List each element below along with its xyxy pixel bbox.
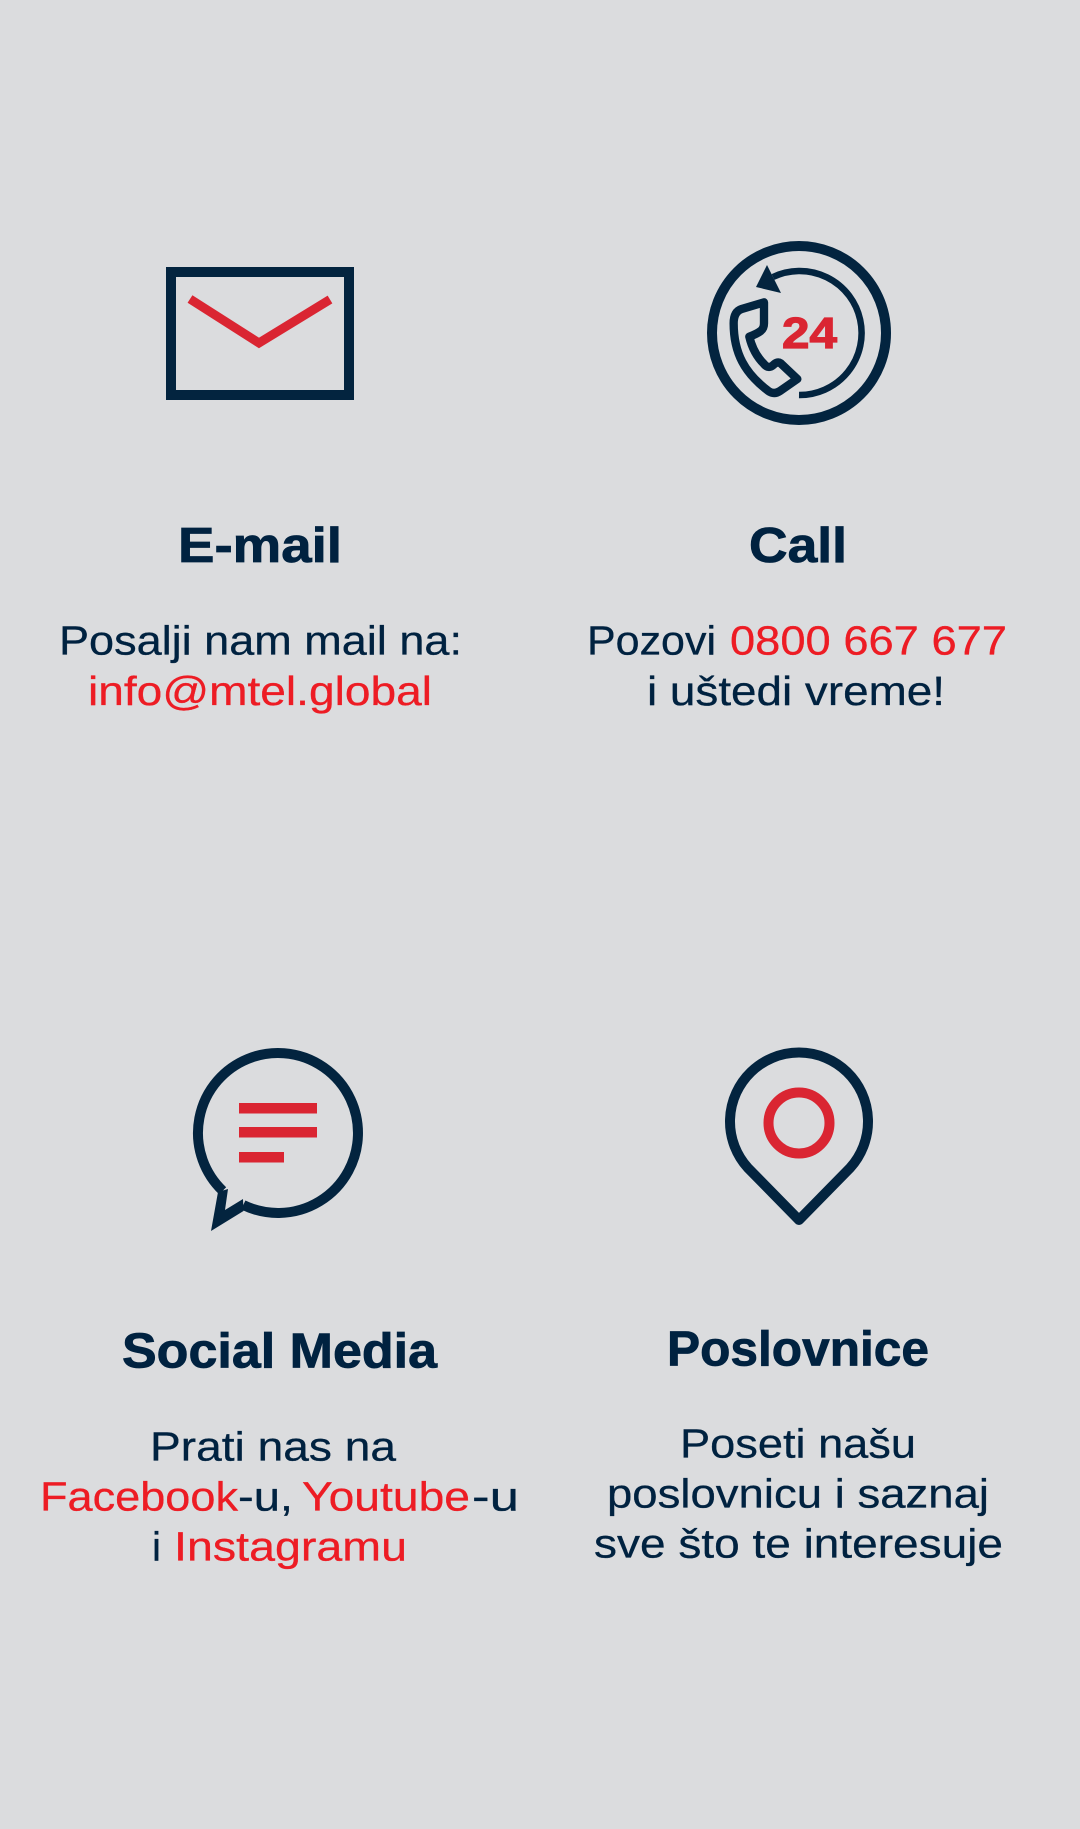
icon: map pin bbox=[730, 1053, 868, 1220]
text: call instructions: Pozovi bbox=[587, 618, 716, 664]
text: call instructions bbox=[587, 618, 1007, 714]
text: e-mail instructions: Posalji nam mail na: bbox=[59, 618, 462, 664]
heading: e-mail: E-mail bbox=[178, 519, 342, 573]
icon: speech bubble bbox=[198, 1053, 358, 1231]
heading: call: Call bbox=[749, 519, 847, 573]
text: call instructions: 0800 667 677 bbox=[730, 618, 1007, 664]
text: social media instructions: Youtube bbox=[302, 1474, 470, 1520]
panel: e-mail bbox=[59, 272, 462, 714]
panel: call bbox=[587, 246, 1007, 714]
icon: 24 hour phone bbox=[712, 246, 886, 420]
text: social media instructions: -u, bbox=[238, 1474, 293, 1520]
text: poslovnice instructions bbox=[594, 1420, 1003, 1566]
text: call instructions: i uštedi vreme! bbox=[647, 668, 945, 714]
text: poslovnice instructions: Poseti našu bbox=[680, 1420, 916, 1466]
text: social media instructions bbox=[40, 1424, 519, 1570]
text: social media instructions: i bbox=[152, 1524, 161, 1570]
text: e-mail instructions: info@mtel.global bbox=[88, 668, 432, 714]
icon: 24 hour phone: 24 bbox=[782, 309, 838, 358]
text: poslovnice instructions: poslovnicu i saznaj bbox=[607, 1470, 989, 1516]
heading: social media: Social Media bbox=[122, 1324, 438, 1378]
text: poslovnice instructions: sve što te interesuje bbox=[594, 1520, 1003, 1566]
panel: poslovnice bbox=[594, 1053, 1003, 1566]
text: social media instructions: -u bbox=[472, 1474, 519, 1520]
panel: social media bbox=[40, 1053, 519, 1570]
icon: envelope bbox=[171, 272, 349, 395]
text: social media instructions: Prati nas na bbox=[150, 1424, 396, 1470]
text: e-mail instructions bbox=[59, 618, 462, 714]
text: social media instructions: Facebook bbox=[40, 1474, 239, 1520]
heading: poslovnice: Poslovnice bbox=[667, 1322, 929, 1376]
text: social media instructions: Instagramu bbox=[174, 1524, 407, 1570]
